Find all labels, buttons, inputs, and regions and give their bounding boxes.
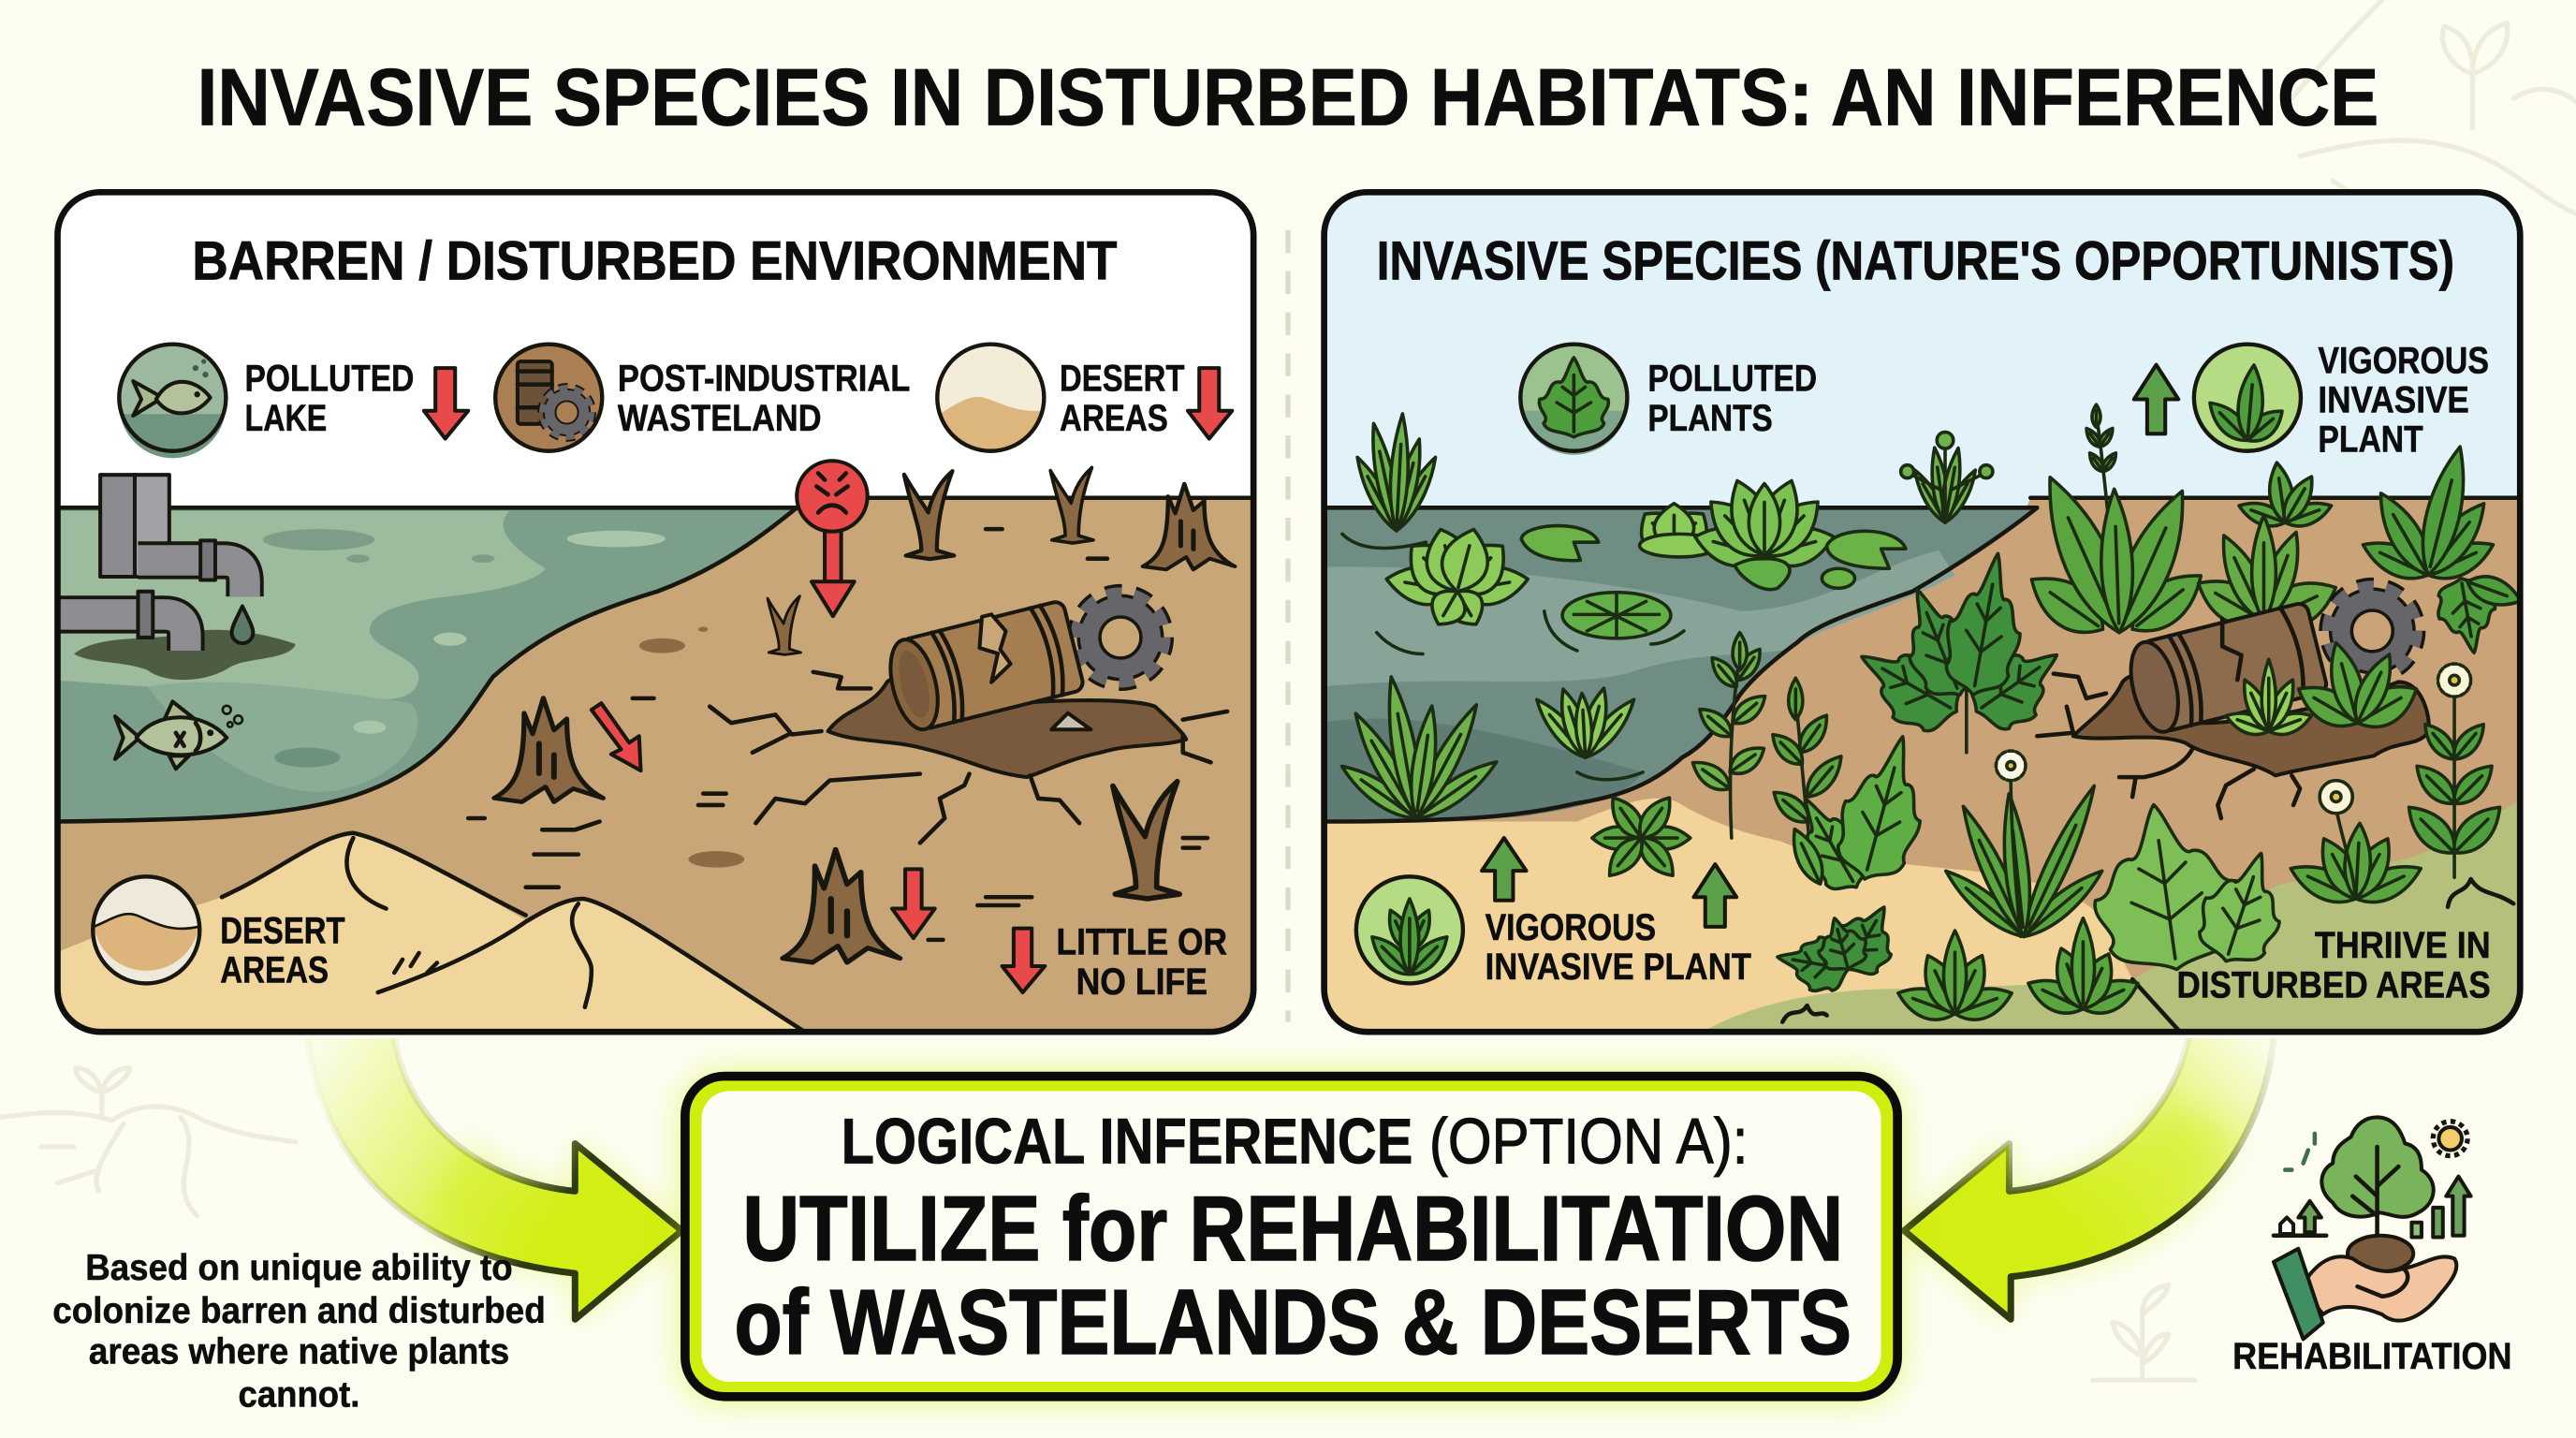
text block: rationale: colonize barren and disturbed — [52, 1291, 546, 1331]
reeds at lake edge — [1355, 412, 1438, 533]
fan plant right — [2361, 445, 2496, 580]
icon: rehabilitation — [2274, 1117, 2471, 1339]
panel: invasive species — [1323, 192, 2525, 1040]
label: desert areas: AREAS — [1060, 398, 1168, 439]
label: vigorous invasive plant: VIGOROUS — [2318, 340, 2489, 381]
inference headline: UTILIZE for REHABILITATION — [742, 1177, 1843, 1280]
grass tufts — [1782, 879, 2513, 1022]
label: polluted plants — [1647, 359, 1817, 439]
ripple marks — [1342, 534, 1684, 780]
pipes — [56, 475, 253, 651]
watermark: left seedling and hills — [0, 1068, 296, 1216]
horizon line — [805, 496, 1255, 499]
panel outline — [57, 192, 1253, 1032]
arrow: growth centre — [1693, 864, 1736, 927]
arrow: lake declines — [424, 368, 468, 439]
label: vigorous invasive plant lower: INVASIVE PLANT — [1486, 946, 1751, 988]
bottom leaf clusters — [1773, 892, 2144, 1027]
arrow: growth left — [1482, 838, 1526, 901]
label: desert areas lower: AREAS — [220, 950, 329, 991]
underwater grass — [1336, 675, 1502, 827]
drooping leaf right — [2433, 569, 2525, 658]
arrow: plants increase — [2134, 365, 2178, 433]
label: thrive in disturbed areas: THRIIVE IN — [2315, 925, 2491, 966]
label: thrive in disturbed areas — [2176, 925, 2491, 1005]
lily pad — [1521, 526, 1599, 561]
lily pads right — [1822, 531, 1906, 588]
tall grass with flower — [1939, 751, 2109, 945]
label: little or no life: NO LIFE — [1076, 961, 1208, 1003]
dead stumps and trees — [494, 467, 1235, 962]
text block: rationale: Based on unique ability to — [85, 1248, 513, 1288]
label: post-industrial wasteland: WASTELAND — [618, 398, 822, 439]
lily pad ribbed — [1562, 593, 1671, 638]
label: post-industrial wasteland: POST-INDUSTRIAL — [618, 359, 910, 400]
title: INVASIVE SPECIES IN DISTURBED HABITATS: AN INFERENCE — [198, 52, 2378, 142]
sand dunes — [56, 833, 810, 1035]
small shoreline plant — [1901, 433, 1993, 526]
heading: barren environment: BARREN / DISTURBED ENVIRONMENT — [192, 230, 1118, 291]
flowering rosette — [2285, 781, 2427, 912]
label: polluted plants: PLANTS — [1647, 398, 1773, 439]
gear among plants — [2330, 588, 2415, 674]
arrow: left panel to inference — [307, 1038, 681, 1319]
soil — [2348, 1236, 2413, 1271]
callout: logical inference — [681, 1071, 1902, 1401]
inference label: LOGICAL INFERENCE — [842, 1106, 1412, 1178]
panel: barren / disturbed environment — [56, 192, 1255, 1040]
polluted lake — [56, 507, 797, 822]
label: thrive in disturbed areas: DISTURBED AREAS — [2176, 964, 2491, 1005]
icon: polluted plants — [1520, 345, 1627, 455]
mud puddle and cracks — [468, 529, 1227, 940]
inference headline: of WASTELANDS & DESERTS — [735, 1270, 1852, 1373]
label: polluted lake — [245, 359, 414, 439]
hand — [2302, 1256, 2456, 1321]
large broadleaf plant — [2029, 476, 2203, 635]
warning sign with arrow — [797, 461, 868, 616]
label: vigorous invasive plant: INVASIVE — [2318, 380, 2469, 421]
text block: rationale — [52, 1248, 546, 1415]
label: vigorous invasive plant lower: VIGOROUS — [1486, 907, 1656, 948]
panel outline — [1325, 192, 2520, 1032]
plant behind barrel — [2189, 515, 2344, 639]
large light oak plant — [2082, 795, 2298, 979]
label: desert areas lower: DESERT — [220, 910, 345, 951]
growth arrows and bars — [2298, 1177, 2471, 1236]
floating rosette — [1384, 528, 1530, 626]
water lily large — [1690, 475, 1838, 590]
label: vigorous invasive plant lower — [1486, 907, 1751, 988]
label: little or no life — [1057, 922, 1227, 1003]
bright seedling on barrel — [2223, 659, 2315, 740]
icon: desert areas — [937, 345, 1044, 451]
small seedling at horizon — [2235, 461, 2334, 532]
divider between panels — [1286, 230, 1290, 1022]
label: post-industrial wasteland — [618, 359, 910, 439]
icon: vigorous invasive plant — [2194, 345, 2301, 451]
icon: desert areas lower — [93, 876, 199, 983]
moss zone — [1692, 799, 2522, 1038]
icon: polluted lake — [119, 345, 226, 458]
dark leafy plant — [1843, 548, 2078, 753]
label: rehabilitation: REHABILITATION — [2232, 1336, 2511, 1377]
label: vigorous invasive plant — [2318, 340, 2489, 461]
watermark: bottom-right sprout — [2093, 1284, 2195, 1380]
oak-leaf plant — [1780, 726, 1940, 902]
sprig on shore — [1687, 633, 1771, 838]
label: desert areas lower — [220, 910, 345, 991]
label: desert areas: DESERT — [1060, 359, 1184, 400]
label: polluted lake: LAKE — [245, 398, 327, 439]
label: little or no life: LITTLE OR — [1057, 922, 1227, 963]
broken barrel — [882, 597, 1085, 734]
fish in lake — [115, 701, 242, 769]
icon: post-industrial wasteland — [495, 345, 602, 451]
weedy lake — [1323, 507, 2037, 822]
rusted gear — [1077, 594, 1164, 681]
arrow: desert declines — [1188, 368, 1232, 439]
fern sprig — [2083, 404, 2119, 513]
watermark: top-right plant outline — [2291, 0, 2576, 213]
sand zone — [1323, 799, 2178, 1038]
label: polluted plants: POLLUTED — [1647, 359, 1817, 400]
label: desert areas — [1060, 359, 1184, 439]
rosette on sand — [1592, 791, 1690, 883]
floating rosette right — [1638, 502, 1708, 559]
mud with cracks — [2037, 674, 2429, 818]
label: vigorous invasive plant: PLANT — [2318, 419, 2423, 461]
arrow: right panel to inference — [1904, 1038, 2274, 1319]
arrow: little or no life — [1003, 929, 1045, 992]
scene: recovering landscape — [1323, 404, 2525, 1040]
label: polluted lake: POLLUTED — [245, 359, 414, 400]
leaves over barrel — [2291, 639, 2425, 738]
inference label: (OPTION A): — [1429, 1106, 1748, 1178]
crown — [2321, 1117, 2434, 1217]
text block: rationale: cannot. — [239, 1374, 359, 1415]
sun — [2438, 1127, 2462, 1151]
arrow: diagonal decline — [592, 703, 641, 770]
icon: vigorous plant lower — [1356, 876, 1463, 983]
scene: barren landscape — [56, 467, 1255, 1040]
underwater weed — [1530, 685, 1641, 763]
arrow: decline near stump — [892, 869, 935, 938]
overgrown barrel — [2122, 598, 2328, 737]
text block: rationale: areas where native plants — [89, 1332, 509, 1372]
inference headline — [735, 1177, 1852, 1373]
horizon line — [2030, 496, 2522, 499]
tall flowering sprig — [2399, 664, 2510, 877]
second sprig — [1766, 678, 1849, 871]
